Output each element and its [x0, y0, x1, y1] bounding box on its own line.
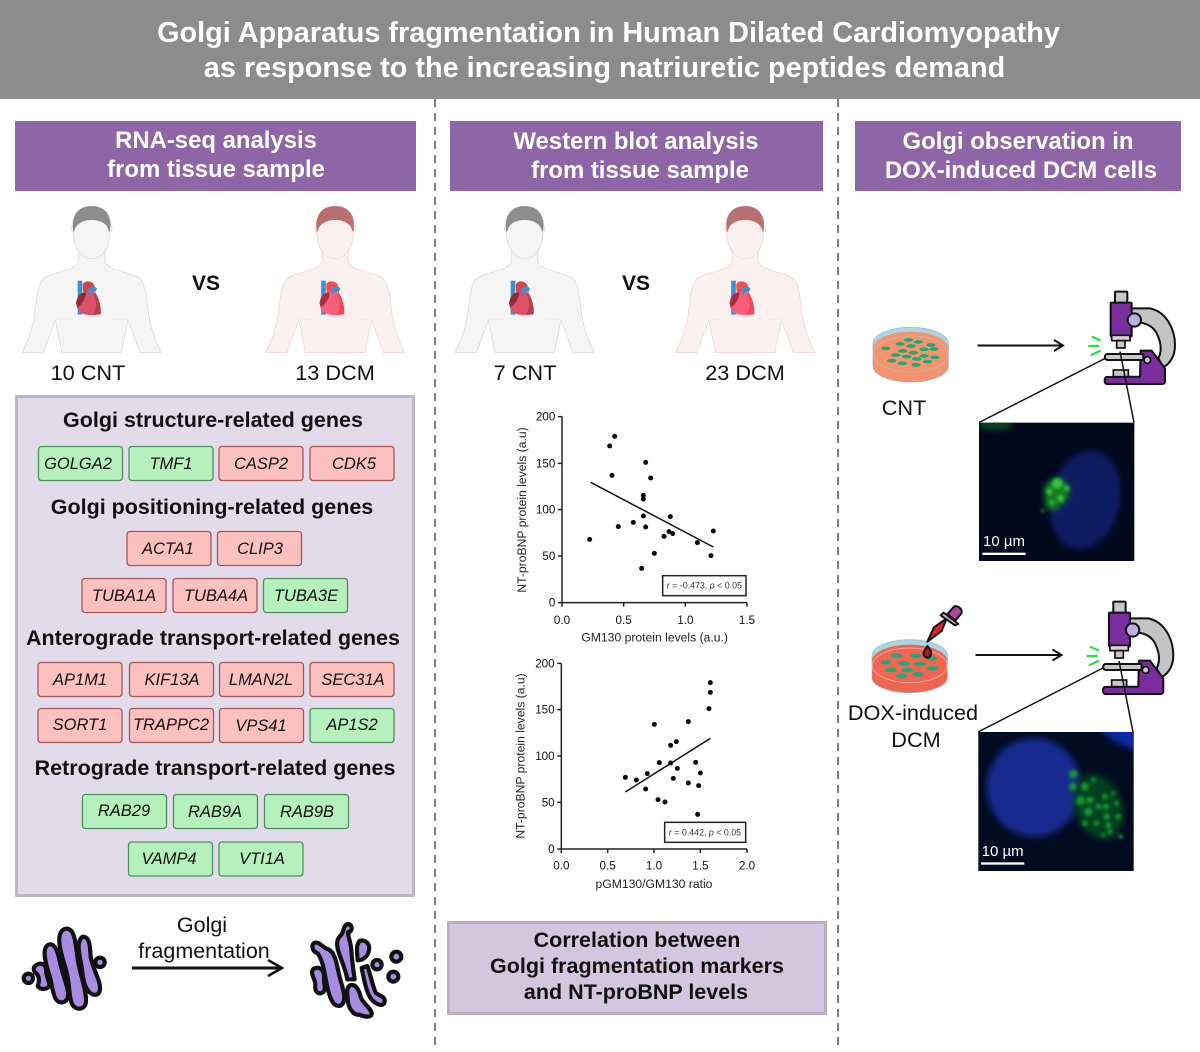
- gene: RAB29: [82, 794, 166, 828]
- gene: TMF1: TMF1: [149, 455, 193, 473]
- label: 13 DCM: 13 DCM: [295, 360, 375, 385]
- title banner: [0, 0, 1200, 99]
- gene: TRAPPC2: TRAPPC2: [133, 716, 209, 734]
- micrograph: CNT cell: 10 µm: [983, 533, 1025, 550]
- panel: DOX-induced cell observation: [848, 602, 1173, 871]
- gene: ACTA1: ACTA1: [141, 540, 194, 558]
- chart: pGM130/GM130 vs NT-proBNP scatter: 1.5: [692, 859, 708, 872]
- chart: pGM130/GM130 vs NT-proBNP scatter: 0: [548, 843, 555, 856]
- callout: correlation summary: and NT-proBNP levels: [524, 980, 748, 1004]
- chart: pGM130/GM130 vs NT-proBNP scatter: 150: [535, 704, 555, 717]
- icon: microscope: [1087, 602, 1173, 694]
- icon: DCM patient torso: [265, 206, 405, 353]
- gene: GOLGA2: GOLGA2: [44, 455, 112, 473]
- chart: pGM130/GM130 vs NT-proBNP scatter: 200: [535, 657, 555, 670]
- gene: AP1M1: AP1M1: [52, 671, 107, 689]
- chart: GM130 vs NT-proBNP scatter: 100: [536, 504, 556, 517]
- panel: RNA-seq cohort comparison: [22, 206, 405, 385]
- label: Golgi fragmentation: Golgi: [177, 913, 227, 937]
- chart: GM130 vs NT-proBNP scatter: 0: [549, 597, 556, 610]
- label: DOX-induced DCM: [848, 700, 978, 752]
- icon: DCM patient torso: [675, 206, 815, 353]
- chart: GM130 vs NT-proBNP scatter: NT-proBNP protein levels (a.u): [515, 427, 529, 593]
- gene: VPS41: VPS41: [235, 717, 287, 735]
- chart: pGM130/GM130 vs NT-proBNP scatter: 2.0: [739, 859, 756, 872]
- gene: VAMP4: [128, 842, 212, 876]
- gene: CASP2: [219, 446, 303, 480]
- gene: SEC31A: SEC31A: [321, 671, 385, 689]
- label: 10 CNT: 10 CNT: [51, 360, 125, 385]
- gene: TRAPPC2: [130, 708, 214, 742]
- heading: Anterograde transport genes: Anterograde transport-related genes: [26, 626, 400, 650]
- label: Golgi fragmentation: fragmentation: [138, 939, 270, 963]
- chart: GM130 vs NT-proBNP scatter: 0.0: [554, 614, 571, 627]
- gene: VAMP4: VAMP4: [141, 850, 197, 868]
- icon: microscope: [1088, 292, 1175, 384]
- chart: GM130 vs NT-proBNP scatter: 1.0: [677, 614, 694, 627]
- gene: TUBA4A: TUBA4A: [184, 587, 248, 605]
- icon: control patient torso: [22, 206, 161, 353]
- gene: SORT1: [38, 708, 122, 742]
- gene: VTI1A: [219, 842, 303, 876]
- gene: VPS41: [220, 708, 304, 742]
- chart: pGM130/GM130 vs NT-proBNP scatter: pGM130/GM130 ratio: [596, 877, 713, 891]
- panel: Western blot cohort comparison: [455, 206, 815, 385]
- label: DOX-induced DCM: DCM: [891, 727, 941, 752]
- gene: SEC31A: [310, 662, 394, 696]
- heading: Golgi observation: DOX-induced DCM cells: [885, 157, 1157, 184]
- gene: RAB9B: RAB9B: [280, 803, 334, 821]
- panel: gene lists: [16, 396, 414, 896]
- gene: LMAN2L: LMAN2L: [229, 671, 293, 689]
- chart: GM130 vs NT-proBNP scatter: 0.5: [616, 614, 632, 627]
- arrow: to microscope: [976, 650, 1062, 660]
- chart: GM130 vs NT-proBNP scatter: [515, 411, 755, 644]
- heading: Golgi observation: [855, 121, 1181, 191]
- gene: SORT1: SORT1: [53, 716, 107, 734]
- chart: GM130 vs NT-proBNP scatter: 1.5: [739, 614, 755, 627]
- chart: pGM130/GM130 vs NT-proBNP scatter: NT-proBNP protein levels (a.u): [513, 673, 527, 839]
- arrow: fragmentation: [132, 960, 282, 976]
- gene: AP1S2: [310, 708, 394, 742]
- heading: RNA-seq analysis: [15, 121, 416, 191]
- gene: CLIP3: [218, 532, 302, 566]
- title banner: as response to the increasing natriuretic peptides demand: [204, 52, 1005, 84]
- zoom lines: [978, 661, 1133, 732]
- label: 23 DCM: 23 DCM: [705, 360, 785, 385]
- panel: CNT cell observation: [873, 292, 1175, 561]
- diagram: Golgi fragmentation: [24, 913, 401, 1017]
- gene: KIF13A: KIF13A: [144, 671, 200, 689]
- label: CNT: CNT: [882, 395, 926, 420]
- heading: RNA-seq analysis: from tissue sample: [107, 156, 325, 183]
- gene: VTI1A: VTI1A: [239, 850, 285, 868]
- chart: GM130 vs NT-proBNP scatter: 50: [542, 550, 556, 563]
- label: VS: VS: [622, 272, 650, 295]
- icon: CNT petri dish: [873, 327, 948, 382]
- gene: TUBA3E: TUBA3E: [274, 587, 339, 605]
- icon: DOX petri dish with dropper: [872, 606, 962, 693]
- label: DOX-induced DCM: DOX-induced: [848, 700, 978, 725]
- label: 7 CNT: 7 CNT: [494, 360, 556, 385]
- gene: TUBA1A: [82, 578, 166, 612]
- chart: pGM130/GM130 vs NT-proBNP scatter: r = 0.442, p < 0.05: [669, 827, 741, 837]
- callout: correlation summary: Correlation between: [534, 928, 740, 952]
- gene: LMAN2L: [220, 662, 304, 696]
- chart: GM130 vs NT-proBNP scatter: GM130 protein levels (a.u.): [581, 630, 728, 644]
- gene: CASP2: CASP2: [234, 455, 288, 473]
- title banner: Golgi Apparatus fragmentation in Human Dilated Cardiomyopathy: [157, 17, 1060, 49]
- gene: GOLGA2: [38, 446, 122, 480]
- zoom lines: [979, 352, 1134, 422]
- gene: AP1M1: [38, 662, 122, 696]
- label: VS: VS: [192, 272, 220, 295]
- micrograph: DOX-induced cell: 10 µm: [982, 843, 1024, 860]
- gene: RAB9A: [174, 794, 258, 828]
- heading: Golgi positioning genes: Golgi positioning-related genes: [51, 495, 373, 519]
- gene: KIF13A: [130, 662, 214, 696]
- chart: pGM130/GM130 vs NT-proBNP scatter: 0.5: [600, 859, 616, 872]
- callout: correlation summary: Golgi fragmentation markers: [490, 954, 784, 978]
- gene: ACTA1: [127, 532, 211, 566]
- gene: TUBA4A: [173, 578, 257, 612]
- heading: Western blot analysis: [450, 121, 823, 191]
- micrograph: CNT cell: [977, 420, 1134, 561]
- chart: pGM130/GM130 vs NT-proBNP scatter: 100: [535, 750, 555, 763]
- chart: pGM130/GM130 vs NT-proBNP scatter: 1.0: [646, 859, 663, 872]
- heading: Retrograde transport genes: Retrograde transport-related genes: [35, 756, 395, 780]
- icon: intact Golgi: [24, 929, 105, 1009]
- gene: TUBA3E: [264, 578, 348, 612]
- gene: CDK5: [310, 446, 394, 480]
- gene: CLIP3: CLIP3: [237, 540, 284, 558]
- chart: pGM130/GM130 vs NT-proBNP scatter: [513, 657, 756, 891]
- label: Golgi fragmentation: [138, 913, 270, 963]
- gene: RAB9B: [264, 794, 348, 828]
- chart: pGM130/GM130 vs NT-proBNP scatter: 50: [542, 796, 555, 809]
- micrograph: DOX-induced cell: [978, 732, 1134, 871]
- heading: Golgi observation: Golgi observation in: [903, 128, 1133, 155]
- chart: GM130 vs NT-proBNP scatter: r = -0.473, p < 0.05: [667, 581, 742, 591]
- gene: AP1S2: AP1S2: [325, 716, 378, 734]
- gene: RAB29: RAB29: [98, 802, 150, 820]
- gene: TUBA1A: TUBA1A: [92, 587, 156, 605]
- gene: CDK5: CDK5: [332, 455, 377, 473]
- chart: GM130 vs NT-proBNP scatter: 200: [536, 411, 556, 424]
- arrow: to microscope: [978, 340, 1063, 351]
- chart: GM130 vs NT-proBNP scatter: 150: [536, 457, 556, 470]
- heading: Golgi structure genes: Golgi structure-related genes: [63, 408, 363, 432]
- gene: TMF1: [129, 446, 213, 480]
- chart: pGM130/GM130 vs NT-proBNP scatter: 0.0: [553, 859, 570, 872]
- icon: fragmented Golgi: [312, 924, 401, 1017]
- heading: Western blot analysis: from tissue sample: [531, 157, 749, 184]
- heading: RNA-seq analysis: RNA-seq analysis: [115, 127, 317, 154]
- heading: Western blot analysis: Western blot analysis: [513, 128, 759, 155]
- gene: RAB9A: RAB9A: [188, 803, 242, 821]
- icon: control patient torso: [455, 206, 594, 353]
- callout: correlation summary: [448, 922, 826, 1014]
